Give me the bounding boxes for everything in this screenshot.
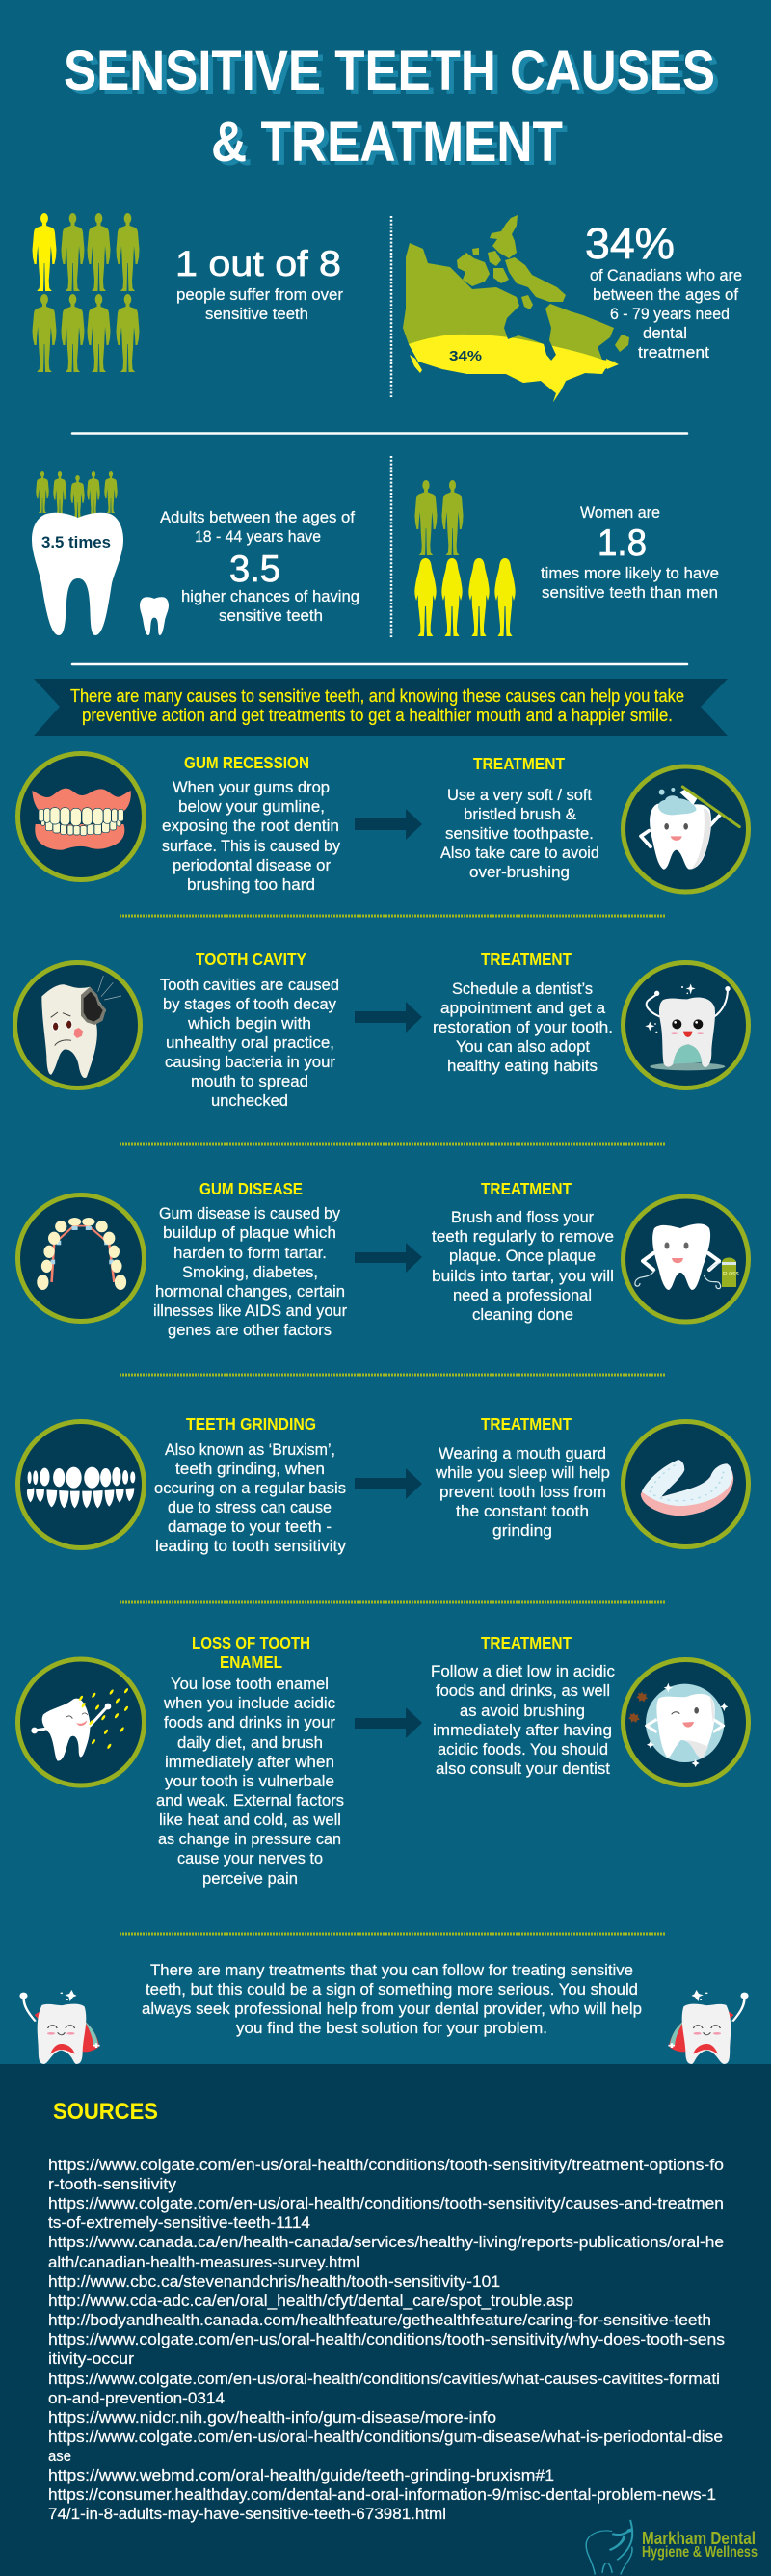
treatment text: You can also adopt [456, 1037, 590, 1056]
closing text: you find the best solution for your problem. [236, 2019, 547, 2037]
heading: loss of tooth enamel: ENAMEL [220, 1652, 282, 1672]
source list: 74/1-in-8-adults-may-have-sensitive-teeth-673981.html [48, 2506, 446, 2523]
treatment text: plaque. Once plaque [449, 1247, 596, 1265]
cause text: hormonal changes, certain [155, 1282, 345, 1301]
treatment text: builds into tartar, you will [432, 1267, 614, 1285]
cause text: periodontal disease or [173, 856, 331, 874]
cause text: immediately after when [165, 1753, 334, 1771]
stat: 34%: 6 - 79 years need [610, 305, 730, 323]
treatment text: Schedule a dentist’s [452, 979, 593, 998]
heading: gum disease: GUM DISEASE [199, 1179, 303, 1198]
source list: https://www.colgate.com/en-us/oral-health/conditions/tooth-sensitivity/causes-and-treatmen [48, 2195, 724, 2213]
closing text: teeth, but this could be a sign of something more serious. You should [146, 1980, 638, 1999]
cause text: occuring on a regular basis [154, 1479, 346, 1497]
treatment text: sensitive toothpaste. [445, 824, 594, 843]
cause text: which begin with [187, 1014, 311, 1033]
cause text [160, 976, 339, 1110]
heading: treatment: TREATMENT [481, 1179, 572, 1198]
footer panel background [0, 2064, 771, 2576]
icon: people on big tooth [32, 471, 123, 635]
icon: dental arch [17, 1195, 145, 1321]
banner: There are many causes to sensitive teeth, and knowing these causes can help you take [70, 686, 684, 706]
treatment text: appointment and get a [440, 999, 606, 1017]
heading: loss of tooth enamel [192, 1633, 310, 1672]
treatment text: Brush and floss your [451, 1208, 594, 1226]
stat: 3.5: sensitive teeth [219, 606, 323, 625]
banner [34, 679, 728, 736]
stat: 1.8 [541, 503, 719, 602]
source list: r-tooth-sensitivity [48, 2176, 177, 2193]
cause text: perceive pain [202, 1869, 298, 1888]
treatment text [440, 786, 599, 881]
logo: Markham Dental [586, 2520, 758, 2575]
stat: 1.8: sensitive teeth than men [542, 583, 718, 602]
treatment text: acidic foods. You should [438, 1740, 608, 1758]
cause text: causing bacteria in your [165, 1053, 335, 1071]
treatment text: Wearing a mouth guard [439, 1444, 606, 1462]
cause text: cause your nerves to [177, 1849, 323, 1867]
treatment text: healthy eating habits [447, 1057, 598, 1075]
source list: http://www.cda-adc.ca/en/oral_health/cfyt/dental_care/spot_trouble.asp [48, 2293, 573, 2310]
cause text: below your gumline, [178, 797, 325, 816]
panel: gum disease [17, 1179, 748, 1339]
source list: ase [48, 2448, 71, 2465]
cause text: like heat and cold, as well [159, 1811, 341, 1829]
cause text [162, 778, 340, 894]
cause text: by stages of tooth decay [163, 995, 336, 1013]
title: & TREATMENT [211, 111, 563, 174]
icon: dentures [17, 754, 145, 879]
source list: https://www.colgate.com/en-us/oral-health/conditions/gum-disease/what-is-periodontal-dise [48, 2428, 723, 2446]
cause text: Also known as ‘Bruxism’, [165, 1440, 335, 1459]
treatment text: the constant tooth [456, 1502, 589, 1520]
source list: http://bodyandhealth.canada.com/healthfeature/gethealthfeature/caring-for-sensitive-teeth [48, 2312, 711, 2329]
source list: http://www.cbc.ca/stevenandchris/health/tooth-sensitivity-101 [48, 2273, 500, 2291]
cause text: Smoking, diabetes, [182, 1263, 318, 1281]
arrow [355, 1468, 422, 1499]
icon: men and women [414, 480, 516, 636]
source list: https://www.colgate.com/en-us/oral-health/conditions/tooth-sensitivity/why-does-tooth-sens [48, 2331, 725, 2348]
cause text: brushing too hard [187, 875, 315, 894]
cause text: as change in pressure can [158, 1830, 341, 1848]
icon: happy tooth [623, 962, 748, 1087]
treatment text: immediately after having [433, 1721, 612, 1739]
treatment text: prevent tooth loss from [439, 1483, 606, 1501]
map of Canada [403, 215, 629, 402]
stat: 3.5 [160, 508, 359, 625]
cause text: Gum disease is caused by [159, 1204, 340, 1222]
stat: 34%: of Canadians who are [590, 266, 742, 284]
treatment text [433, 979, 613, 1075]
cause text: surface. This is caused by [162, 837, 340, 855]
panel: Canada 34% [403, 215, 742, 402]
stat: 1 out of 8: sensitive teeth [205, 305, 308, 323]
treatment text [431, 1662, 615, 1778]
source list: itivity-occur [48, 2350, 135, 2368]
icon: winking clean tooth [623, 1660, 748, 1785]
treatment text: Follow a diet low in acidic [431, 1662, 615, 1680]
cause text: When your gums drop [173, 778, 330, 796]
treatment text [432, 1208, 614, 1324]
arrow [355, 809, 422, 840]
title: & TREATMENT [216, 115, 568, 177]
treatment text: grinding [492, 1521, 552, 1540]
cause text: teeth grinding, when [175, 1460, 325, 1478]
heading: sources: SOURCES [53, 2099, 158, 2125]
treatment text: while you sleep will help [435, 1463, 610, 1482]
stat: 34%: dental [643, 324, 687, 342]
icon: decayed tooth [15, 962, 141, 1087]
icon: tooth with floss [623, 1196, 748, 1322]
cause text: due to stress can cause [168, 1498, 332, 1516]
stat: 3.5: Adults between the ages of [160, 508, 355, 526]
panel: 3.5 times [32, 471, 359, 635]
source list: https://www.nidcr.nih.gov/health-info/gum-disease/more-info [48, 2409, 496, 2427]
icon: people on big tooth: 3.5 times [41, 533, 111, 551]
banner: preventive action and get treatments to get a healthier mouth and a happier smile. [82, 706, 673, 725]
treatment text: foods and drinks, as well [436, 1681, 610, 1700]
icon: mouth guard [623, 1421, 748, 1546]
cause text [153, 1204, 347, 1339]
cause text: unhealthy oral practice, [166, 1033, 334, 1052]
source list: https://consumer.healthday.com/dental-and-oral-information-9/misc-dental-problem-news-1 [48, 2486, 716, 2504]
heading: treatment: TREATMENT [481, 950, 572, 969]
cause text: and weak. External factors [156, 1791, 344, 1810]
cause text: mouth to spread [191, 1072, 308, 1090]
heading: loss of tooth enamel: LOSS OF TOOTH [192, 1633, 310, 1652]
label: 34% on map: 34% [449, 348, 482, 364]
icon: tooth with acid drops [17, 1659, 145, 1785]
arrow [355, 1243, 422, 1273]
treatment text: need a professional [453, 1286, 592, 1304]
source list: ts-of-extremely-sensitive-teeth-1114 [48, 2214, 310, 2232]
stat: 1.8: times more likely to have [541, 564, 719, 582]
cause text: You lose tooth enamel [171, 1675, 329, 1693]
cause text: buildup of plaque which [163, 1223, 336, 1242]
stat: 1 out of 8: people suffer from over [176, 285, 343, 304]
cause text [154, 1440, 347, 1555]
stat: 3.5: higher chances of having [181, 587, 359, 605]
title [64, 40, 720, 177]
treatment text: teeth regularly to remove [432, 1227, 614, 1246]
cause text: harden to form tartar. [173, 1244, 327, 1262]
treatment text: as avoid brushing [460, 1702, 585, 1720]
cause text: exposing the root dentin [162, 817, 339, 835]
icon: clenched teeth [17, 1421, 145, 1548]
panel: loss of tooth enamel [17, 1633, 748, 1888]
panel: gum recession [17, 753, 748, 894]
cause text: when you include acidic [163, 1694, 335, 1712]
treatment text: Also take care to avoid [440, 844, 599, 862]
stat: 3.5: 18 - 44 years have [195, 527, 321, 546]
source list: https://www.canada.ca/en/health-canada/services/healthy-living/reports-publications/oral-he [48, 2234, 724, 2251]
source list: https://www.colgate.com/en-us/oral-health/conditions/cavities/what-causes-cavitites-formati [48, 2371, 720, 2388]
cause text: leading to tooth sensitivity [155, 1537, 347, 1555]
icon: small tooth [140, 597, 169, 635]
cause text: unchecked [211, 1091, 288, 1110]
treatment text: also consult your dentist [436, 1759, 610, 1778]
closing text [142, 1961, 642, 2037]
cause text: genes are other factors [168, 1321, 332, 1339]
stat: 1 out of 8 [175, 244, 343, 323]
treatment text: over-brushing [469, 863, 570, 881]
heading: gum recession: GUM RECESSION [184, 753, 309, 772]
source list: on-and-prevention-0314 [48, 2390, 225, 2407]
cause text: daily diet, and brush [177, 1733, 323, 1752]
stat: 1 out of 8: 1 out of 8 [175, 244, 341, 283]
heading: treatment: TREATMENT [473, 754, 565, 773]
icon: superhero tooth right [668, 1990, 749, 2064]
treatment text [435, 1444, 610, 1540]
icon: eight people, one highlighted [33, 213, 139, 372]
stat: 1.8: Women are [580, 503, 660, 522]
treatment text: Use a very soft / soft [447, 786, 592, 804]
cause text: your tooth is vulnerbale [165, 1772, 334, 1790]
stat: 34%: treatment [638, 343, 709, 362]
closing text: always seek professional help from your dental provider, who will help [142, 1999, 642, 2018]
panel: 1 out of 8 [33, 213, 343, 372]
cause text: foods and drinks in your [164, 1713, 335, 1731]
heading: treatment: TREATMENT [481, 1414, 572, 1434]
icon: superhero tooth left [19, 1990, 100, 2064]
panel: tooth cavity [15, 950, 748, 1110]
icon: tooth brushing [623, 766, 748, 892]
treatment text: bristled brush & [464, 805, 577, 823]
treatment text: cleaning done [472, 1305, 573, 1324]
cause text: Tooth cavities are caused [160, 976, 339, 994]
stat: 3.5: 3.5 [229, 549, 280, 590]
closing text: There are many treatments that you can follow for treating sensitive [150, 1961, 633, 1979]
source list: https://www.colgate.com/en-us/oral-health/conditions/tooth-sensitivity/treatment-options-fo [48, 2157, 724, 2174]
treatment text: restoration of your tooth. [433, 1018, 613, 1036]
source list: alth/canadian-health-measures-survey.html [48, 2254, 359, 2271]
stat: 34%: between the ages of [593, 285, 738, 304]
arrow [355, 1707, 422, 1738]
arrow [355, 1002, 422, 1033]
panel: teeth grinding [17, 1414, 748, 1555]
source list [48, 2157, 725, 2523]
stat: 34% [585, 219, 742, 362]
heading: treatment: TREATMENT [481, 1633, 572, 1652]
cause text [156, 1675, 344, 1888]
icon: tooth with floss: FLOSS [723, 1272, 739, 1277]
stat: 34%: 34% [585, 219, 675, 268]
cause text: illnesses like AIDS and your [153, 1301, 347, 1320]
heading: tooth cavity: TOOTH CAVITY [196, 950, 306, 969]
stat: 1.8: 1.8 [598, 523, 647, 564]
panel: women 1.8 [414, 480, 719, 636]
heading: teeth grinding: TEETH GRINDING [186, 1414, 316, 1434]
source list: https://www.webmd.com/oral-health/guide/teeth-grinding-bruxism#1 [48, 2467, 554, 2484]
cause text: damage to your teeth - [168, 1517, 332, 1536]
